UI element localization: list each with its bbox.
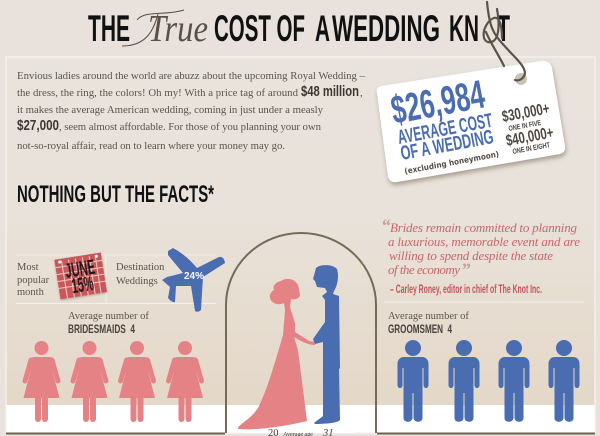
title: KN <box>449 8 479 49</box>
quote: a luxurious, memorable event and are <box>388 234 580 249</box>
tag label <box>396 110 495 165</box>
quote: Brides remain committed to planning <box>390 220 578 235</box>
intro text block <box>17 70 366 152</box>
intro text block: , <box>360 87 363 99</box>
quote: of the economy <box>388 262 460 277</box>
tag stats: ONE IN EIGHT <box>512 140 551 156</box>
text: bridesmaids: Average number of <box>68 311 149 322</box>
tag stats: $30,000+ <box>501 100 551 126</box>
tag price: $26,984 <box>388 72 489 133</box>
text: destination weddings: Weddings <box>116 276 158 287</box>
tag note: (excluding honeymoon) <box>404 150 500 176</box>
text: destination weddings: Destination <box>116 262 165 273</box>
intro text block: the dress, the ring, the colors! Oh my! With a price tag of around <box>17 87 299 99</box>
icon: bride silhouette <box>238 279 316 429</box>
text: most popular month: popular <box>17 275 50 286</box>
text: most popular month: Most <box>17 262 39 273</box>
title <box>88 8 510 50</box>
text: groomsmen <box>388 311 469 336</box>
text: bridesmaids <box>68 311 149 336</box>
text: average age <box>268 428 334 436</box>
title: T <box>497 8 510 49</box>
icon: knot string <box>484 2 525 80</box>
tag card <box>376 61 565 182</box>
icon: calendar: JUNE <box>64 256 97 283</box>
icon: plane <box>162 248 225 312</box>
title: True <box>148 8 208 50</box>
heading: facts: NOTHING BUT THE FACTS* <box>17 181 214 208</box>
tag stats: ONE IN FIVE <box>508 118 542 133</box>
icon: calendar <box>54 252 107 300</box>
icon: calendar: 15% <box>70 272 95 298</box>
title: COST OF <box>214 8 305 49</box>
quote: “ <box>381 216 391 237</box>
icons: groomsmen <box>398 340 580 422</box>
tag stats: $40,000+ <box>505 124 555 150</box>
icon: groom silhouette <box>313 265 340 424</box>
arch <box>226 233 376 433</box>
tag stats <box>501 100 555 156</box>
price tag <box>376 61 565 182</box>
text: groomsmen: Average number of <box>388 311 469 322</box>
text: bridesmaids: BRIDESMAIDS 4 <box>68 324 135 336</box>
facts dividers <box>16 255 216 304</box>
title: WEDDING <box>332 8 440 49</box>
intro text block: not-so-royal affair, read on to learn where your money may go. <box>17 140 285 152</box>
text: most popular month: month <box>17 287 45 298</box>
title: THE <box>88 8 130 49</box>
intro text block: Envious ladies around the world are abuzz about the upcoming Royal Wedding – <box>17 70 366 82</box>
intro text block: , seem almost affordable. For those of you planning your own <box>59 121 322 133</box>
tag hole <box>515 73 527 85</box>
icon: plane: 24% <box>184 271 204 282</box>
intro text block: it makes the average American wedding, coming in just under a measly <box>17 104 324 116</box>
quote <box>381 216 580 281</box>
quote: willing to spend despite the state <box>389 248 553 263</box>
icons: bridesmaids <box>24 341 203 422</box>
tag label: AVERAGE COST <box>396 110 494 149</box>
text: most popular month <box>17 262 50 298</box>
tag label: OF A WEDDING <box>399 126 495 165</box>
intro text block: $27,000 <box>17 117 59 134</box>
text: destination weddings <box>116 262 165 287</box>
text: groomsmen: GROOMSMEN 4 <box>388 324 452 336</box>
quote: ” <box>461 260 471 281</box>
intro text block: $48 million <box>301 83 359 100</box>
title: A <box>315 8 330 49</box>
